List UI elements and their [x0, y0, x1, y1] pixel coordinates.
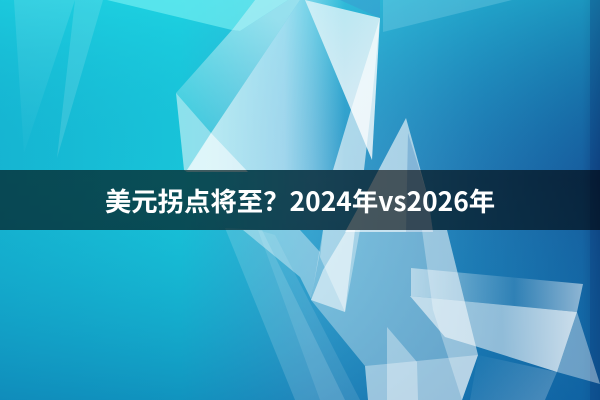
- title: 美元拐点将至？2024年vs2026年: [105, 180, 495, 219]
- top-left faint shards: [14, 0, 103, 158]
- central large crystal: [176, 0, 512, 172]
- top light facets: [107, 0, 288, 31]
- dark title band: [0, 170, 600, 230]
- lower left streaks: [225, 228, 360, 400]
- lower crystal cluster: [311, 230, 478, 400]
- right translucent panes: [410, 268, 600, 400]
- right spire: [345, 118, 433, 232]
